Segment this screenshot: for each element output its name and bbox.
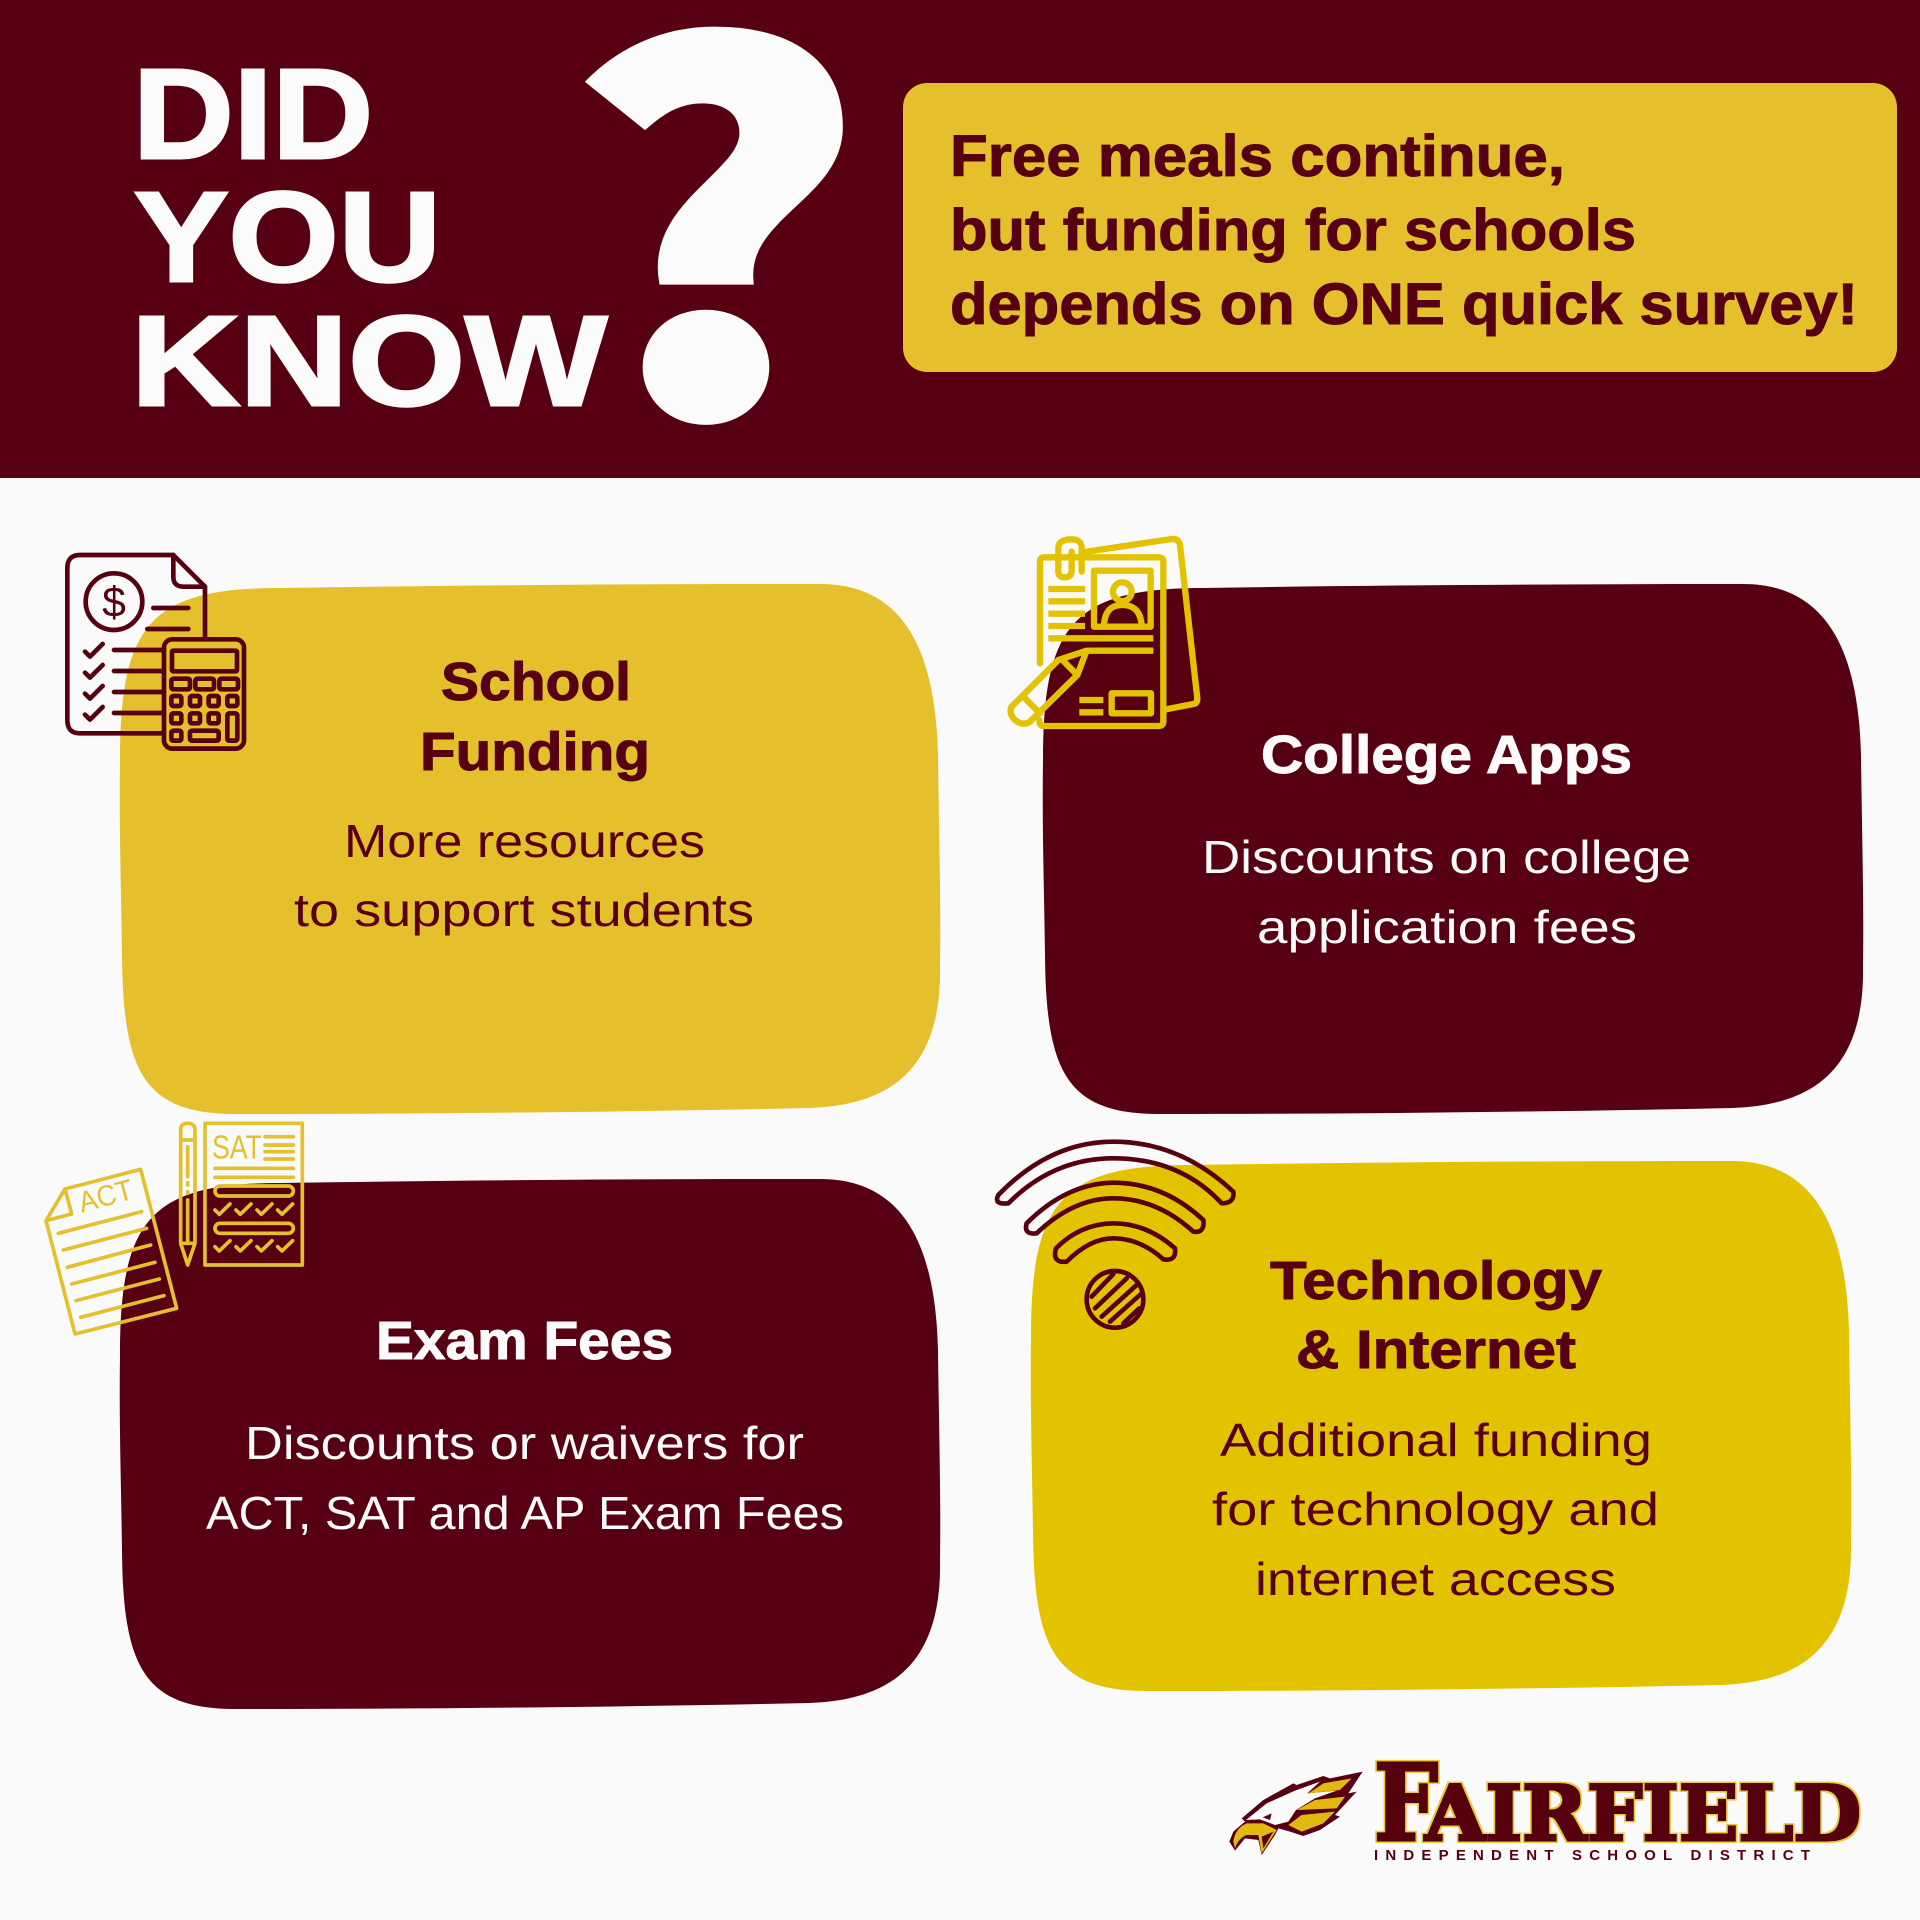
logo: fairfield independent school district	[1229, 1740, 1861, 1865]
wordmark: fairfield: AIRFIELD	[1424, 1769, 1861, 1858]
panel: exam fees: ACT, SAT and AP Exam Fees	[206, 1487, 844, 1539]
panel: technology and internet	[1031, 1161, 1851, 1691]
panel: school funding: to support students	[294, 884, 754, 936]
panel: technology and internet: & Internet	[1296, 1320, 1576, 1380]
icon: invoice and calculator: $	[102, 579, 126, 627]
panel: exam fees: Exam Fees	[376, 1311, 673, 1371]
panel: school funding: School	[441, 652, 631, 712]
icon: college application	[1011, 539, 1197, 726]
callout: free meals	[903, 83, 1897, 372]
title: did you know: DID	[133, 43, 373, 186]
panel: college apps	[1043, 584, 1863, 1114]
header band	[0, 0, 1920, 478]
callout: free meals: Free meals continue,	[950, 124, 1565, 189]
logo: fairfield independent school district: INDEPENDENT SCHOOL DISTRICT	[1374, 1847, 1810, 1864]
panel: technology and internet: Technology	[1270, 1251, 1602, 1311]
title: did you know: KNOW	[131, 290, 607, 433]
icon: act and sat test papers: SAT	[212, 1129, 262, 1166]
icon: eagle head	[1229, 1772, 1363, 1855]
panel: exam fees: Discounts or waivers for	[245, 1417, 804, 1469]
wordmark: fairfield	[1374, 1740, 1861, 1865]
panel: college apps: Discounts on college	[1202, 831, 1691, 883]
panel: school funding: Funding	[420, 722, 650, 782]
icon: act and sat test papers: ACT	[75, 1173, 137, 1219]
panel: technology and internet: Additional funding	[1220, 1414, 1652, 1466]
panel: school funding: More resources	[344, 815, 705, 867]
title: did you know: YOU	[134, 166, 441, 309]
icon: act and sat test papers	[46, 1123, 302, 1334]
panel: school funding	[120, 584, 940, 1114]
panel: exam fees	[120, 1179, 940, 1709]
panel: college apps: application fees	[1257, 901, 1637, 953]
wordmark: fairfield: F	[1374, 1740, 1438, 1865]
panel: technology and internet: internet access	[1255, 1553, 1616, 1605]
callout: free meals: depends on ONE quick survey!	[950, 272, 1858, 337]
callout: free meals: but funding for schools	[950, 198, 1636, 263]
panel: college apps: College Apps	[1261, 725, 1632, 785]
icon: wifi signal	[997, 1142, 1233, 1328]
icon: invoice and calculator	[67, 555, 244, 749]
panel: technology and internet: for technology and	[1212, 1483, 1659, 1535]
title: did you know	[131, 43, 607, 433]
